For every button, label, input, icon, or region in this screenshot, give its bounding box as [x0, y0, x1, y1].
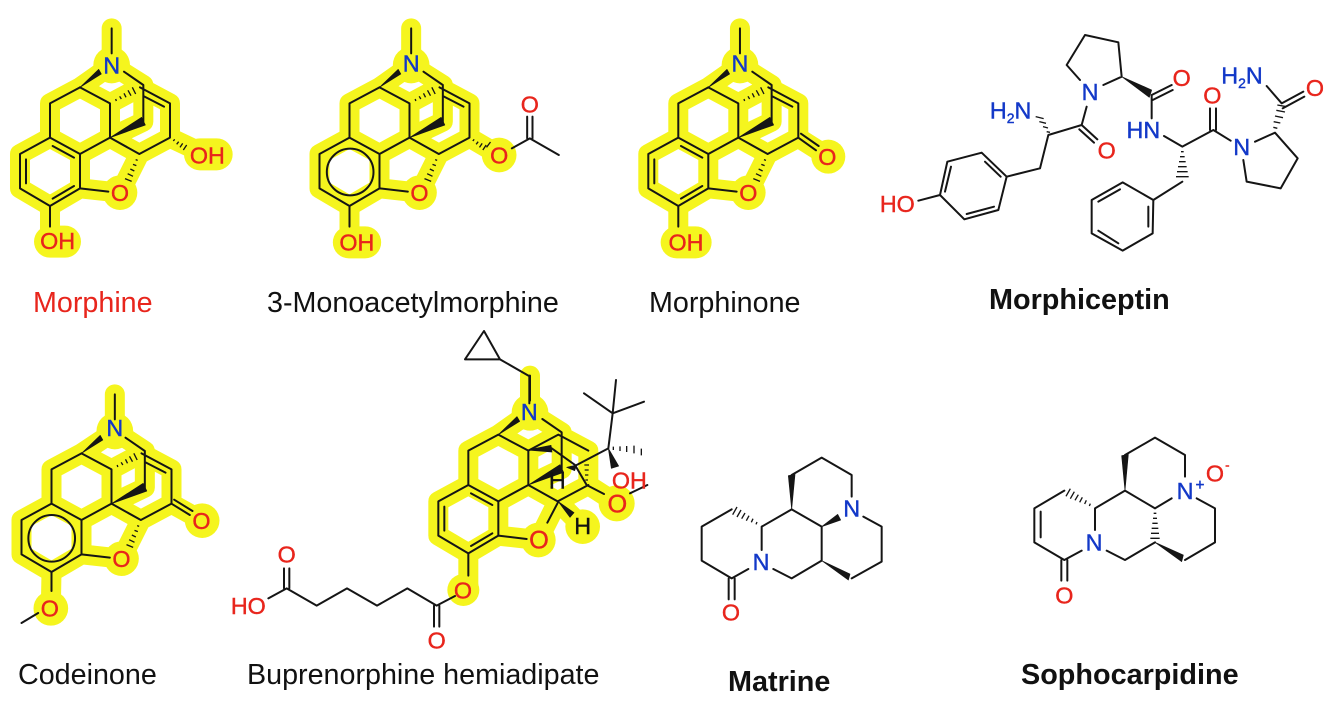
structure: morphiceptin: O [1098, 137, 1116, 163]
label: 3-Monoacetylmorphine: 3-Monoacetylmorphine [267, 287, 559, 319]
label: Sophocarpidine: Sophocarpidine [1021, 659, 1239, 691]
label: Morphinone: Morphinone [649, 287, 801, 319]
structure: morphinone: N [732, 51, 748, 77]
structure: codeinone [21, 394, 219, 626]
structure: morphiceptin: 2 [1238, 75, 1246, 91]
structure: 3-monoacetylmorphine [319, 28, 559, 256]
label: Buprenorphine hemiadipate: Buprenorphine hemiadipate [247, 659, 599, 691]
structure: matrine [702, 458, 882, 626]
structure: buprenorphine hemiadipate [438, 331, 647, 606]
adipate chain: HO [231, 593, 266, 619]
structure: matrine: O [722, 600, 740, 626]
structure: morphiceptin [880, 35, 1324, 251]
structure: buprenorphine hemiadipate: N [521, 399, 538, 425]
structure: morphiceptin: H [990, 97, 1007, 123]
structure: morphiceptin: N [1233, 134, 1250, 160]
structure: matrine: N [753, 549, 769, 575]
structure: morphinone [648, 28, 845, 256]
structure: morphine: N [103, 52, 120, 78]
structure: morphiceptin: N [1082, 79, 1098, 105]
structure: sophocarpidine: - [1225, 457, 1230, 472]
structure: morphiceptin: N [1246, 62, 1263, 88]
structure: codeinone: O [192, 508, 211, 534]
structure: buprenorphine hemiadipate: H [549, 468, 566, 494]
structure: codeinone: N [106, 415, 123, 441]
structure: sophocarpidine: O [1206, 461, 1224, 487]
structure: sophocarpidine [1034, 438, 1230, 608]
structure: morphiceptin: O [1173, 65, 1191, 91]
structure: buprenorphine hemiadipate: H [574, 513, 591, 539]
structure: 3-monoacetylmorphine: O [410, 180, 429, 206]
structure: buprenorphine hemiadipate: O [454, 577, 472, 603]
label: Matrine: Matrine [728, 666, 830, 698]
structure: buprenorphine hemiadipate: O [607, 490, 627, 518]
structure: 3-monoacetylmorphine: O [521, 92, 539, 118]
structure: morphine: OH [190, 142, 225, 168]
structure: morphiceptin: HO [880, 191, 915, 217]
structure: buprenorphine hemiadipate: OH [612, 467, 647, 493]
structure: morphine: OH [40, 228, 75, 254]
structure: morphine: O [111, 180, 129, 206]
structure: morphiceptin: 2 [1007, 110, 1015, 126]
structure: sophocarpidine: O [1055, 582, 1073, 608]
label: Morphine: Morphine [33, 287, 153, 319]
structure: morphine [20, 28, 225, 254]
structure: buprenorphine hemiadipate: O [529, 527, 549, 555]
structure: morphinone: O [818, 144, 836, 170]
adipate chain [231, 542, 455, 653]
structure: matrine: N [843, 496, 860, 522]
structure: morphiceptin: HN [1126, 117, 1160, 143]
structure: 3-monoacetylmorphine: OH [339, 230, 374, 256]
adipate chain: O [278, 542, 296, 568]
structure: sophocarpidine: + [1196, 477, 1205, 494]
structure: morphiceptin: O [1306, 75, 1324, 101]
structure: morphinone: O [739, 180, 757, 206]
structure: 3-monoacetylmorphine: O [490, 142, 508, 168]
structure: morphiceptin: H [1221, 62, 1238, 88]
structure: codeinone: O [41, 595, 59, 621]
structure: codeinone: O [112, 546, 131, 572]
structure: morphiceptin: O [1203, 82, 1221, 108]
label: Morphiceptin: Morphiceptin [989, 284, 1170, 316]
structure: morphiceptin: N [1015, 97, 1031, 123]
structure: sophocarpidine: N [1086, 530, 1102, 556]
structure: 3-monoacetylmorphine: N [403, 51, 420, 77]
structure: morphinone: OH [668, 230, 703, 256]
structure: sophocarpidine: N [1177, 478, 1193, 504]
adipate chain: O [428, 627, 446, 653]
label: Codeinone: Codeinone [18, 659, 157, 691]
